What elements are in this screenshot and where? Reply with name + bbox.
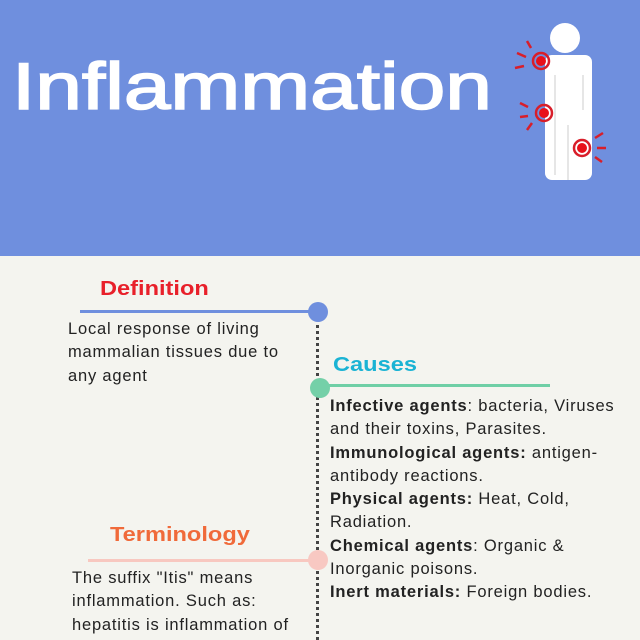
panel: terminology (72, 524, 328, 634)
causes list: Immunological agents: antigen- (330, 444, 598, 462)
icon: human figure with inflamed joints (514, 23, 606, 180)
causes list: Radiation. (330, 513, 412, 531)
connector line pink (88, 559, 320, 562)
terminology text (72, 569, 289, 634)
panel: definition (68, 278, 328, 385)
node blue (308, 302, 328, 322)
definition text: any agent (68, 367, 148, 385)
connector line green (321, 384, 550, 387)
causes list: Infective agents: bacteria, Viruses (330, 397, 614, 415)
causes list: Inert materials: Foreign bodies. (330, 583, 592, 601)
definition text: mammalian tissues due to (68, 343, 279, 361)
terminology text: hepatitis is inflammation of (72, 616, 289, 634)
causes list: and their toxins, Parasites. (330, 420, 547, 438)
heading: Causes: Causes (333, 354, 417, 376)
heading: Terminology: Terminology (110, 524, 250, 546)
panel: causes (310, 354, 614, 601)
causes list: antibody reactions. (330, 467, 484, 485)
title: Inflammation (12, 49, 492, 123)
causes list: Chemical agents: Organic & (330, 537, 564, 555)
terminology text: inflammation. Such as: (72, 592, 257, 610)
causes list: Physical agents: Heat, Cold, (330, 490, 570, 508)
causes list: Inorganic poisons. (330, 560, 478, 578)
node pink (308, 550, 328, 570)
definition text (68, 320, 279, 385)
causes list (330, 397, 614, 601)
definition text: Local response of living (68, 320, 260, 338)
timeline: dotted vertical line (316, 318, 319, 640)
connector line blue (80, 310, 320, 313)
header banner (0, 0, 640, 256)
terminology text: The suffix "Itis" means (72, 569, 253, 587)
heading: Definition: Definition (100, 278, 209, 300)
node green (310, 378, 330, 398)
